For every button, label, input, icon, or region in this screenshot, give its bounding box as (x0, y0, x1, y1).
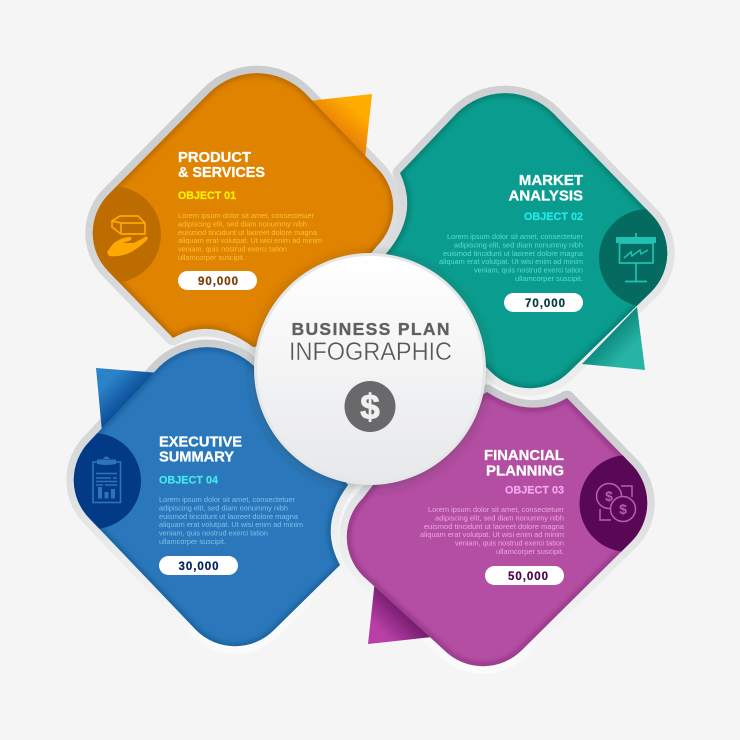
value pill: 30,000 (159, 556, 238, 575)
body text: object 02: aliquam erat volutpat. Ut wisi enim ad minim (439, 257, 583, 266)
body text: object 04: ullamcorper suscipit. (159, 537, 226, 546)
label: object 03: OBJECT 03 (505, 484, 564, 496)
heading: market analysis (509, 172, 583, 204)
blue panel fill (74, 347, 348, 646)
heading: market analysis: MARKET (519, 172, 583, 189)
body text: object 04: euismod tincidunt ut laoreet dolore magna (159, 512, 299, 521)
body text: object 02: veniam, quis nostrud exerci tation (474, 266, 583, 275)
icon: dollar coin: $ (360, 388, 380, 427)
value pill: 50,000 (485, 566, 564, 585)
orange panel fill (93, 73, 393, 347)
center circle (252, 253, 488, 489)
icon badge: hand holding box (92, 186, 161, 282)
teal inner shadow (385, 93, 667, 388)
panel: executive summary (45, 347, 348, 646)
body text: object 03: ullamcorper suscipit. (496, 547, 564, 556)
heading: market analysis: ANALYSIS (509, 188, 583, 204)
value pill: 70,000: 70,000 (525, 298, 565, 310)
body text: object 03: veniam, quis nostrud exerci tation (455, 539, 564, 548)
heading: financial planning: PLANNING (486, 462, 564, 479)
label: object 02: OBJECT 02 (524, 211, 583, 223)
icon badge: coins exchange: $ (605, 488, 613, 504)
folded corner: purple (368, 580, 432, 644)
orange inner shadow (93, 73, 393, 347)
icon badge: presentation board (599, 209, 668, 306)
heading: product and services: & SERVICES (178, 164, 265, 181)
value pill: 90,000 (178, 271, 257, 290)
body text: object 03: euismod tincidunt ut laoreet dolore magna (424, 522, 565, 531)
body text: object 02: adipiscing elit, sed diam nonummy nibh (454, 240, 583, 249)
body text: object 01 (178, 211, 322, 262)
body text: object 01: veniam, quis nostrud exerci tation (178, 245, 287, 254)
body text: object 03: aliquam erat volutpat. Ut wisi enim ad minim (420, 530, 564, 539)
heading: executive summary: SUMMARY (159, 449, 234, 466)
body text: object 02: euismod tincidunt ut laoreet dolore magna (443, 249, 584, 258)
heading: financial planning: FINANCIAL (484, 447, 564, 464)
purple panel fill (347, 392, 647, 666)
folded corner: teal (582, 307, 645, 370)
body text: object 01: ullamcorper suscipit. (178, 253, 245, 262)
icon: dollar coin (344, 381, 396, 432)
body text: object 01: aliquam erat volutpat. Ut wisi enim ad minim (178, 236, 322, 245)
icon badge: clipboard report (74, 433, 141, 529)
purple inner shadow (347, 392, 647, 666)
body text: object 04: aliquam erat volutpat. Ut wisi enim ad minim (159, 520, 303, 529)
value pill: 50,000: 50,000 (508, 571, 548, 583)
title: infographic: INFOGRAPHIC (289, 338, 452, 366)
body text: object 02: ullamcorper suscipit. (515, 274, 583, 283)
value pill: 30,000: 30,000 (178, 561, 218, 573)
body text: object 01: adipiscing elit, sed diam nonummy nibh (178, 219, 307, 228)
blue inner shadow (74, 347, 348, 646)
body text: object 03: adipiscing elit, sed diam nonummy nibh (435, 513, 564, 522)
heading: executive summary: EXECUTIVE (159, 434, 242, 451)
heading: product and services: PRODUCT (178, 149, 251, 166)
body text: object 01: Lorem ipsum dolor sit amet, consectetuer (178, 211, 315, 220)
heading: product and services (178, 149, 265, 181)
body text: object 01: euismod tincidunt ut laoreet dolore magna (178, 228, 318, 237)
value pill: 90,000: 90,000 (198, 276, 238, 288)
icon badge: coins exchange: $ (619, 501, 627, 517)
folded corner: orange (308, 94, 372, 158)
heading: executive summary (159, 434, 242, 466)
body text: object 04: adipiscing elit, sed diam nonummy nibh (159, 503, 288, 512)
panel: market analysis (385, 93, 697, 388)
teal panel fill (385, 93, 667, 388)
folded corner: blue (96, 368, 160, 432)
body text: object 02 (439, 232, 584, 283)
value pill: 70,000 (504, 293, 583, 312)
icon badge: coins exchange (580, 455, 648, 552)
body text: object 04: Lorem ipsum dolor sit amet, consectetuer (159, 495, 296, 504)
body text: object 04 (159, 495, 303, 546)
body text: object 03 (420, 505, 565, 556)
body text: object 03: Lorem ipsum dolor sit amet, consectetuer (428, 505, 565, 514)
panel: product and services (64, 73, 393, 347)
heading: financial planning (484, 447, 564, 479)
panel: financial planning (347, 392, 676, 666)
body text: object 02: Lorem ipsum dolor sit amet, consectetuer (447, 232, 584, 241)
title: business plan: BUSINESS PLAN (292, 319, 450, 339)
label: object 01: OBJECT 01 (178, 190, 236, 202)
label: object 04: OBJECT 04 (159, 475, 219, 487)
body text: object 04: veniam, quis nostrud exerci tation (159, 529, 268, 538)
